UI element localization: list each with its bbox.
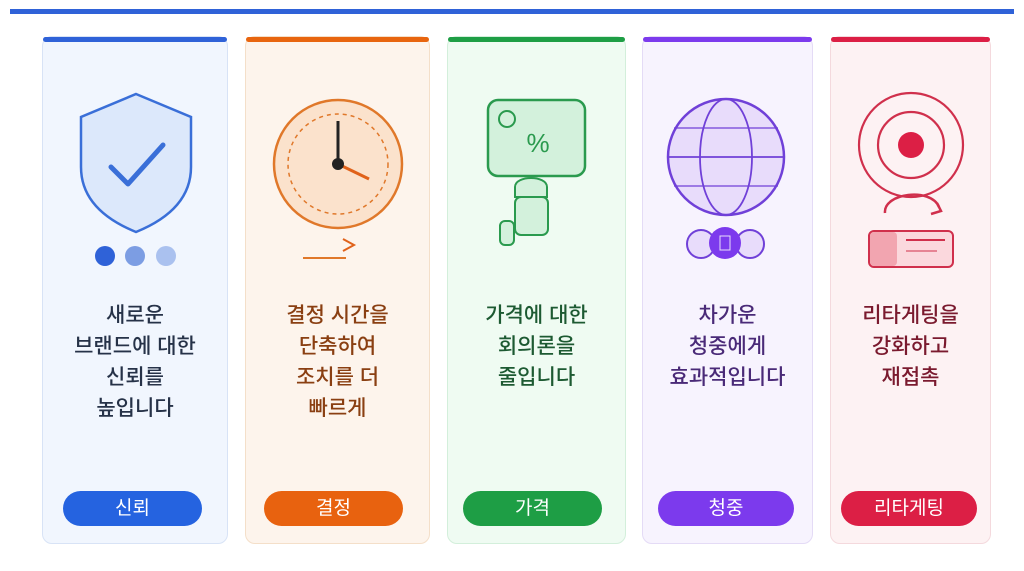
text: trust: 높입니다 bbox=[96, 397, 174, 420]
panel: price bbox=[447, 36, 626, 544]
text: audience bbox=[670, 304, 785, 389]
panel: retargeting bbox=[830, 36, 991, 544]
icon: shield bbox=[80, 92, 192, 266]
pill: 결정 bbox=[264, 491, 403, 526]
top rule bbox=[10, 9, 1014, 14]
text: price: 줄입니다 bbox=[498, 366, 575, 389]
pill: 신뢰 bbox=[63, 491, 202, 526]
text: trust: 새로운 bbox=[106, 304, 164, 327]
pill: 리타게팅: 리타게팅 bbox=[874, 498, 944, 519]
icon: globe bbox=[666, 98, 786, 259]
text: decision bbox=[286, 304, 389, 420]
text: decision: 결정 시간을 bbox=[286, 304, 389, 327]
pill: 결정: 결정 bbox=[316, 498, 351, 519]
pill: 청중 bbox=[658, 491, 794, 526]
icon: price tag with hand bbox=[486, 98, 586, 246]
pill: 리타게팅 bbox=[841, 491, 977, 526]
text: decision: 빠르게 bbox=[309, 397, 366, 420]
panel: decision bbox=[245, 36, 430, 544]
icon: clock bbox=[272, 98, 404, 259]
text: trust: 신뢰를 bbox=[106, 366, 164, 389]
icon: target bbox=[858, 92, 964, 268]
pill: 가격: 가격 bbox=[515, 498, 550, 519]
text: retargeting: 리타게팅을 bbox=[862, 304, 959, 327]
text: decision: 단축하여 bbox=[299, 335, 376, 358]
pill: 청중: 청중 bbox=[709, 498, 743, 519]
text: audience: 청중에게 bbox=[689, 335, 766, 358]
icon: price tag with hand: % bbox=[526, 128, 550, 158]
text: audience: 차가운 bbox=[699, 304, 756, 327]
pill: 가격 bbox=[463, 491, 602, 526]
text: decision: 조치를 더 bbox=[296, 366, 379, 389]
text: price: 가격에 대한 bbox=[485, 304, 588, 327]
text: price bbox=[485, 304, 588, 389]
text: trust: 브랜드에 대한 bbox=[74, 335, 196, 358]
text: retargeting bbox=[862, 304, 959, 389]
text: retargeting: 재접촉 bbox=[882, 366, 939, 389]
panel: trust bbox=[42, 36, 228, 544]
pill: 신뢰: 신뢰 bbox=[115, 498, 150, 519]
text: retargeting: 강화하고 bbox=[872, 335, 949, 358]
panel: audience bbox=[642, 36, 813, 544]
text: trust bbox=[74, 304, 196, 420]
text: price: 회의론을 bbox=[498, 335, 575, 358]
text: audience: 효과적입니다 bbox=[670, 366, 785, 389]
